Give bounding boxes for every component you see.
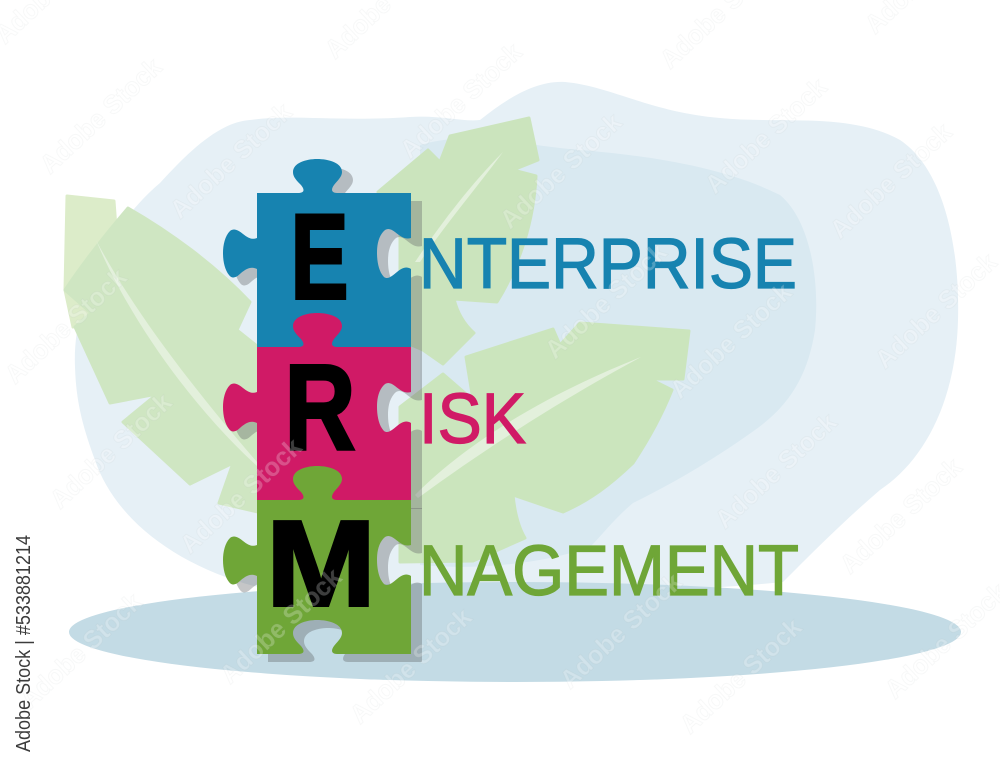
- leaf: top: [378, 118, 538, 364]
- watermarks: Adobe Stock: [214, 561, 348, 689]
- watermarks: Adobe Stock: [834, 451, 968, 579]
- letter E: E: [290, 188, 348, 324]
- watermarks: Adobe Stock: [0, 261, 133, 389]
- watermarks: Adobe Stock: [554, 566, 688, 694]
- watermarks: Adobe Stock: [824, 116, 958, 244]
- watermarks: Adobe Stock: [709, 406, 843, 534]
- word: isk: ISK: [419, 379, 526, 459]
- leaf vein: [415, 152, 503, 262]
- leaf: left: [65, 196, 262, 513]
- letter R: R: [284, 340, 356, 476]
- puzzle piece: R magenta: [223, 313, 411, 501]
- ground ellipse: [69, 582, 961, 682]
- watermarks: Adobe Stock: [14, 586, 148, 714]
- background blob: inner blue: [420, 139, 816, 567]
- watermarks: Adobe Stock: [664, 276, 798, 404]
- puzzle piece: M green: [223, 466, 411, 654]
- watermarks: Adobe Stock: [174, 431, 308, 559]
- vertical credit: Adobe Stock | #533881214: [13, 535, 35, 752]
- puzzle piece: E blue: [223, 159, 411, 347]
- letter M: M: [266, 496, 376, 632]
- word: nagement: NAGEMENT: [419, 531, 799, 611]
- watermarks: Adobe Stock: [674, 611, 808, 739]
- watermarks: Adobe Stock: [344, 601, 478, 729]
- piece shadows: [234, 167, 422, 662]
- watermarks: Adobe Stock: [44, 386, 178, 514]
- word: nterprise: NTERPRISE: [419, 224, 797, 304]
- background blob: outer pale blue: [75, 82, 958, 593]
- leaf vein: [415, 357, 641, 498]
- watermarks: Adobe Stock: [164, 96, 298, 224]
- leaf vein: [96, 240, 257, 466]
- watermarks: Adobe Stock: [494, 106, 628, 234]
- watermarks: Adobe Stock: [539, 236, 673, 364]
- watermarks: Adobe Stock: [699, 71, 833, 199]
- watermarks: Adobe Stock: [394, 36, 528, 164]
- leaf: bottom right: [400, 323, 689, 562]
- watermarks: Adobe Stock: [34, 51, 168, 179]
